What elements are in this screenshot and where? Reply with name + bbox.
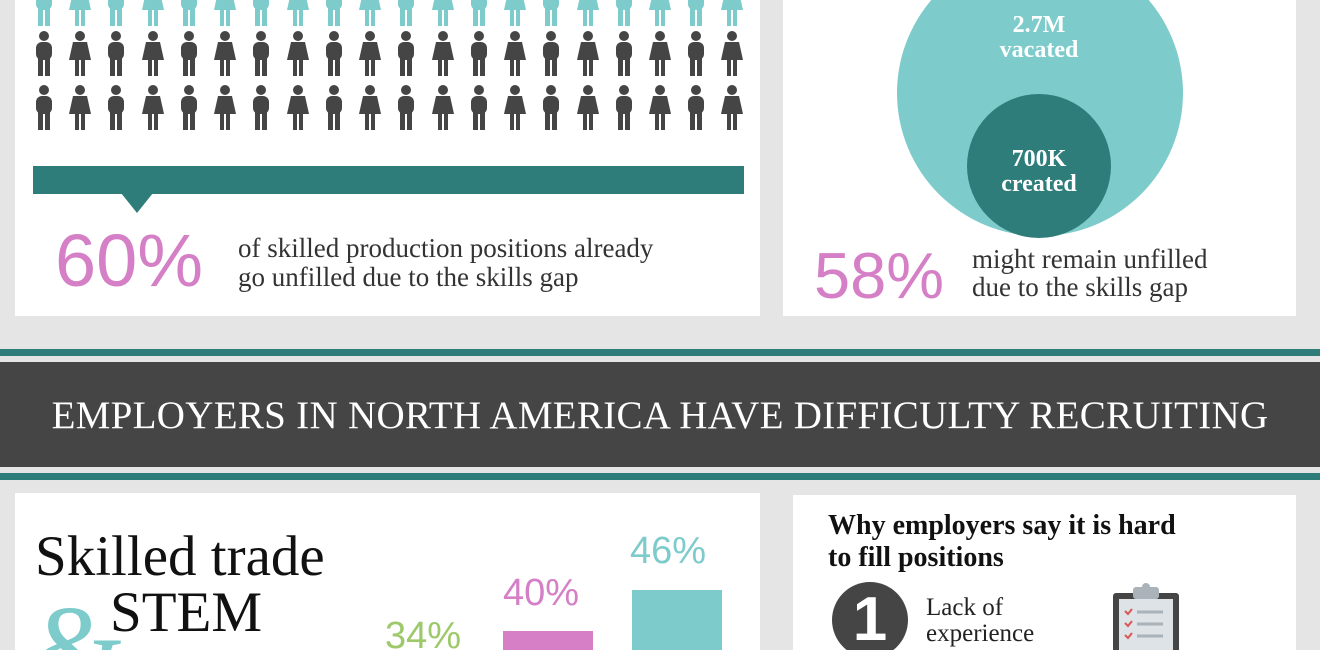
caption xyxy=(238,233,654,292)
circle chart: vacated xyxy=(1000,37,1079,63)
bar chart: 40% xyxy=(503,572,579,614)
reason text xyxy=(926,594,1034,647)
caption: go unfilled due to the skills gap xyxy=(238,262,578,292)
circle chart: 700K xyxy=(1012,146,1067,172)
reason text: Lack of xyxy=(926,594,1003,621)
heading: Why employers say it is hard xyxy=(828,510,1176,541)
stat 60%: 60% xyxy=(55,219,203,302)
bar chart: 46% xyxy=(630,530,706,572)
caption: might remain unfilled xyxy=(972,244,1207,274)
panel: unfilled positions xyxy=(15,0,760,316)
stat 58%: 58% xyxy=(814,239,944,312)
reason text: experience xyxy=(926,620,1034,647)
circle chart: created xyxy=(1001,171,1077,197)
circle chart xyxy=(897,0,1183,238)
caption: of skilled production positions already xyxy=(238,233,653,263)
caption xyxy=(972,244,1208,302)
icon: clipboard xyxy=(1113,583,1179,650)
caption: due to the skills gap xyxy=(972,272,1188,302)
heading: to fill positions xyxy=(828,542,1004,573)
panel: vacated vs created xyxy=(783,0,1296,316)
bar chart xyxy=(385,530,722,650)
heading xyxy=(828,510,1176,573)
heading: Skilled trade xyxy=(35,525,325,588)
people icon grid xyxy=(36,0,743,130)
circle chart: 2.7M xyxy=(1013,12,1065,38)
panel: skilled trade & STEM xyxy=(15,493,760,650)
section banner xyxy=(0,349,1320,480)
panel: why hard to fill xyxy=(793,495,1296,650)
STEM: STEM xyxy=(110,581,262,644)
banner title: EMPLOYERS IN NORTH AMERICA HAVE DIFFICULTY RECRUITING xyxy=(52,394,1268,437)
teal bar with pointer xyxy=(33,166,744,213)
